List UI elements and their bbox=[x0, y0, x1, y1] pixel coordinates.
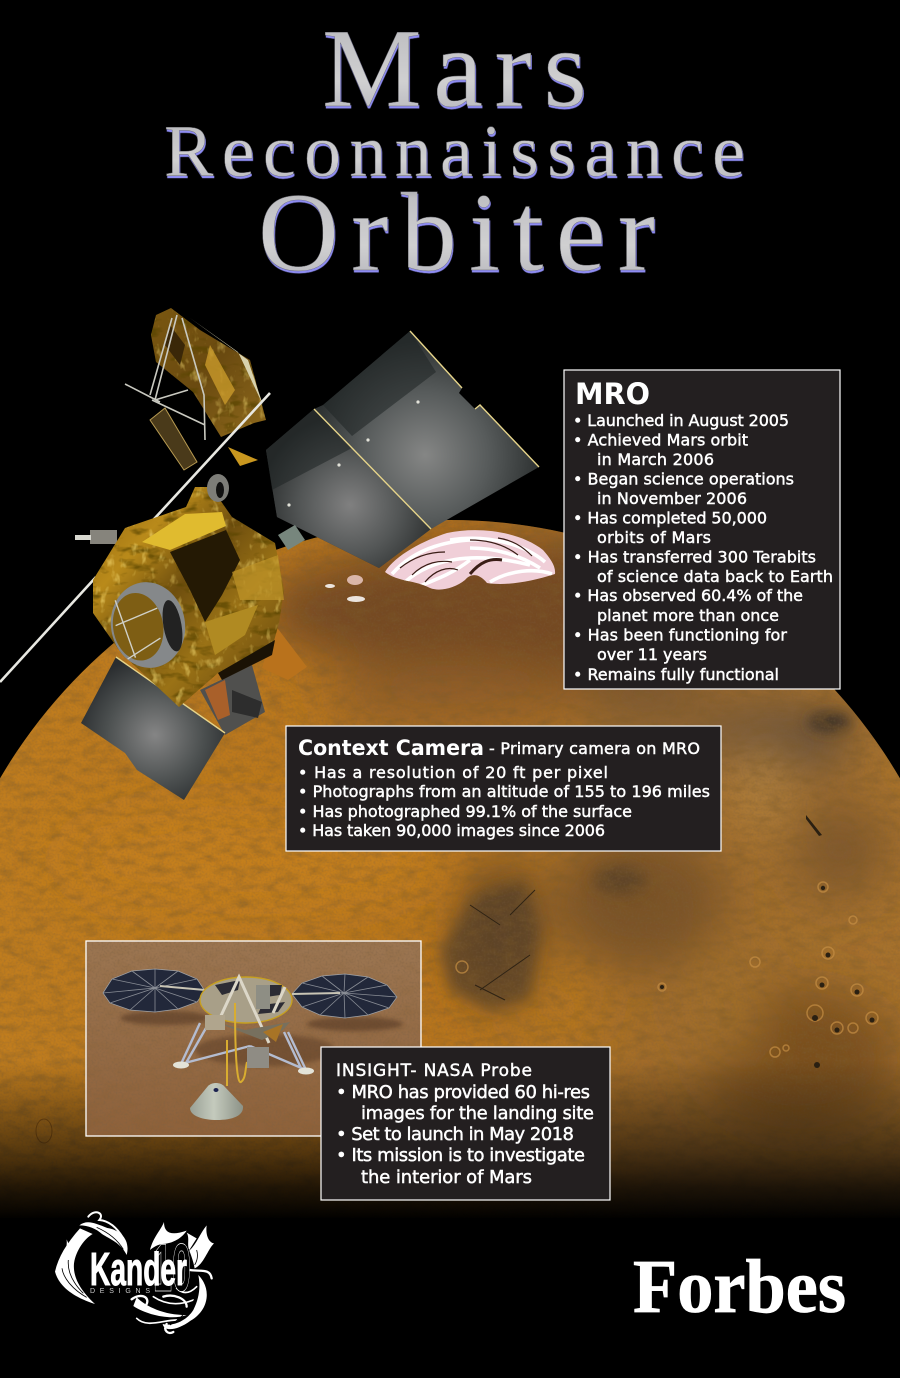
title bbox=[164, 7, 745, 295]
list: camera facts bbox=[298, 763, 710, 840]
list: MRO facts: • Has been functioning for bbox=[573, 626, 787, 644]
high gain antenna dish bbox=[125, 300, 275, 470]
list: MRO facts: orbits of Mars bbox=[597, 528, 711, 547]
planet Mars bbox=[0, 500, 900, 1378]
seismometer cone bbox=[190, 1083, 243, 1120]
list: InSight facts: • Its mission is to investigate bbox=[336, 1145, 585, 1166]
photo: InSight lander bbox=[86, 941, 421, 1136]
list: MRO facts: • Remains fully functional bbox=[573, 665, 779, 684]
list: InSight facts: the interior of Mars bbox=[361, 1167, 532, 1188]
craters bbox=[456, 882, 878, 1057]
solar panel: left bbox=[103, 969, 205, 1012]
list: MRO facts: • Achieved Mars orbit bbox=[573, 430, 748, 450]
lower camera cluster bbox=[200, 625, 307, 735]
logo: Forbes: Forbes bbox=[633, 1245, 846, 1329]
list: MRO facts bbox=[573, 411, 833, 684]
north polar ice cap bbox=[325, 525, 560, 602]
heading: Context Camera: Context Camera bbox=[298, 736, 484, 760]
lander body bbox=[200, 1018, 290, 1040]
list: MRO facts: • Launched in August 2005 bbox=[573, 411, 789, 430]
panel: MRO facts bbox=[564, 370, 840, 689]
panel: InSight probe bbox=[321, 1047, 610, 1200]
panel: Context Camera bbox=[286, 726, 721, 851]
list: InSight facts: • MRO has provided 60 hi-res bbox=[336, 1082, 590, 1103]
title line: Reconnaissance: Reconnaissance bbox=[164, 111, 745, 193]
list: camera facts: • Has photographed 99.1% of the surface bbox=[298, 802, 632, 821]
gold bus bbox=[90, 485, 290, 710]
list: MRO facts: • Has transferred 300 Terabits bbox=[573, 548, 816, 566]
title line: Orbiter: Orbiter bbox=[258, 171, 655, 295]
side gimbal bbox=[207, 474, 305, 550]
heading: MRO: MRO bbox=[575, 377, 650, 411]
list: InSight facts: images for the landing site bbox=[361, 1103, 594, 1124]
antenna truss bbox=[125, 315, 205, 440]
list: MRO facts: • Began science operations bbox=[573, 470, 794, 488]
lander deck bbox=[200, 977, 292, 1023]
list: MRO facts: • Has completed 50,000 bbox=[573, 508, 767, 528]
logo: Kander Designs 10 bbox=[55, 1212, 214, 1333]
subheading: primary camera: - Primary camera on MRO bbox=[489, 739, 700, 758]
list: MRO facts: in November 2006 bbox=[597, 489, 747, 508]
list: MRO facts: of science data back to Earth bbox=[597, 567, 833, 586]
list: camera facts: • Photographs from an altitude of 155 to 196 miles bbox=[298, 782, 710, 801]
solar array: lower bbox=[81, 657, 225, 800]
optical telescope ring bbox=[104, 576, 192, 674]
list: MRO facts: over 11 years bbox=[597, 645, 707, 664]
logo word Designs: DESIGNS bbox=[90, 1288, 150, 1295]
list: camera facts: • Has taken 90,000 images since 2006 bbox=[298, 821, 605, 840]
list: camera facts: • Has a resolution of 20 ft per pixel bbox=[298, 763, 608, 782]
boom bbox=[0, 393, 270, 682]
legs bbox=[181, 1023, 306, 1070]
heading: InSight: INSIGHT- NASA Probe bbox=[336, 1061, 532, 1081]
instrument box bbox=[247, 1047, 269, 1068]
list: MRO facts: planet more than once bbox=[597, 606, 779, 625]
lander shadow bbox=[120, 1011, 210, 1025]
logo word Kander: Kander bbox=[90, 1243, 187, 1295]
list: MRO facts: • Has observed 60.4% of the bbox=[573, 586, 803, 605]
list: MRO facts: in March 2006 bbox=[597, 450, 714, 469]
MRO spacecraft illustration bbox=[0, 300, 539, 800]
logo number 10: 10 bbox=[153, 1230, 191, 1306]
list: InSight facts: • Set to launch in May 2018 bbox=[336, 1124, 574, 1145]
logo flames bbox=[55, 1212, 214, 1333]
solar panel: right bbox=[292, 974, 397, 1018]
solar array: right bbox=[266, 331, 539, 568]
yellow tether bbox=[227, 1003, 247, 1086]
title line: Mars: Mars bbox=[322, 7, 587, 131]
sensor at left bbox=[75, 530, 117, 544]
list: InSight facts bbox=[336, 1082, 594, 1188]
antenna instrument bay bbox=[150, 408, 197, 470]
